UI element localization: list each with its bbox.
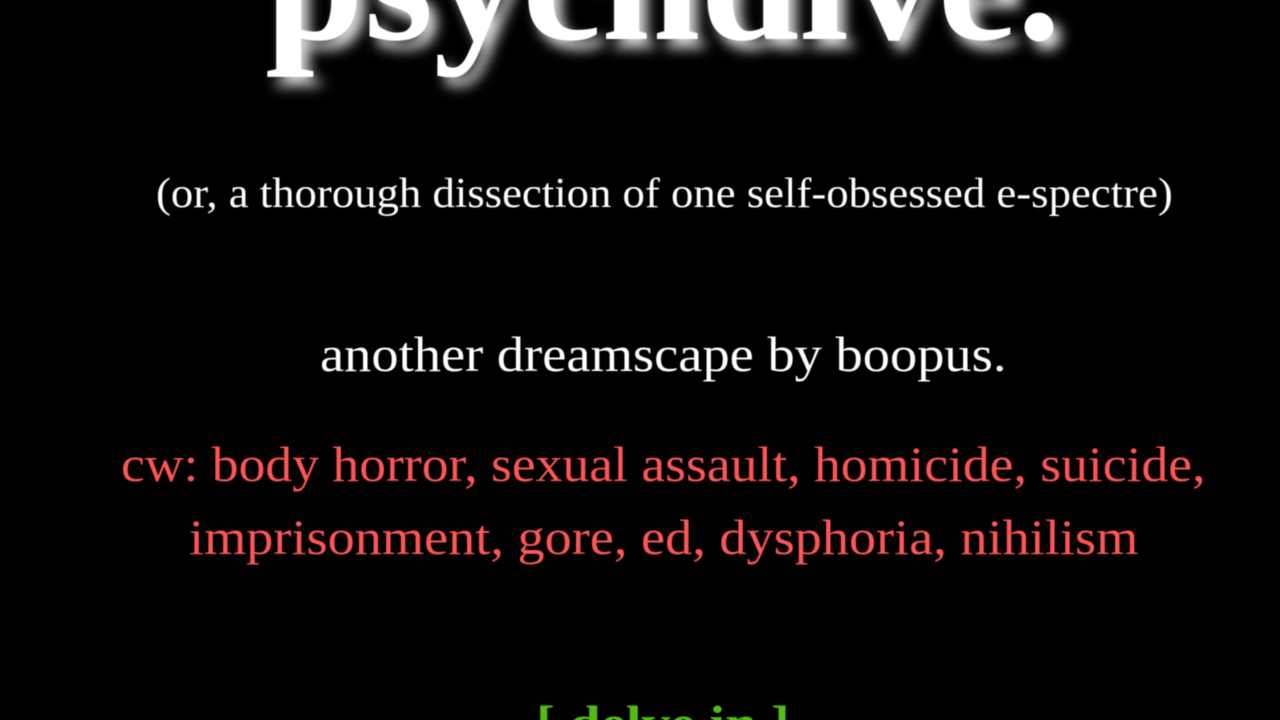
author line: another dreamscape by boopus. xyxy=(320,326,1006,382)
content warning: imprisonment, gore, ed, dysphoria, nihilism xyxy=(189,509,1138,565)
content warning: cw: body horror, sexual assault, homicide, suicide, xyxy=(121,436,1205,492)
subtitle: (or, a thorough dissection of one self-obsessed e-spectre) xyxy=(156,171,1173,217)
content warning xyxy=(121,436,1205,566)
